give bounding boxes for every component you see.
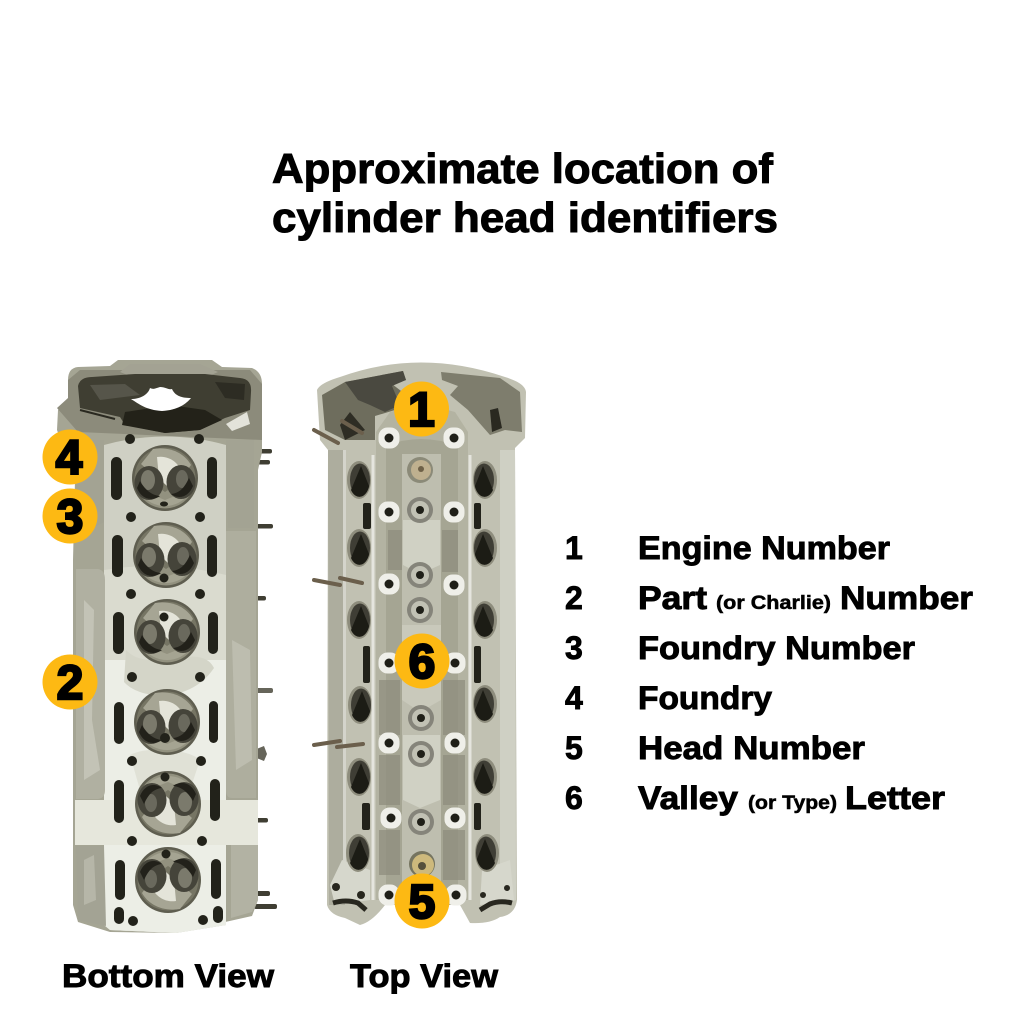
cylinders bbox=[132, 445, 198, 511]
bolt pads bbox=[378, 428, 400, 448]
casting hole bbox=[131, 387, 191, 411]
legend item 5 bbox=[565, 730, 865, 766]
legend item 1: Engine Number bbox=[638, 530, 890, 566]
gasket deck bbox=[104, 436, 226, 933]
dark top chamber bbox=[78, 374, 251, 433]
valve ports bbox=[347, 461, 371, 499]
legend item 6 bbox=[565, 780, 945, 816]
central bosses bbox=[407, 457, 433, 483]
legend item 2 bbox=[565, 580, 973, 616]
label: top view: Top View bbox=[350, 958, 498, 994]
marker 1: 1 bbox=[408, 384, 435, 437]
legend item 4: 4 bbox=[565, 680, 583, 716]
legend item 2: Number bbox=[840, 580, 973, 616]
legend item 4: Foundry bbox=[638, 680, 772, 716]
legend item 3: Foundry Number bbox=[638, 630, 915, 666]
marker 2 bbox=[42, 654, 98, 710]
legend item 6: (or Type) bbox=[748, 793, 837, 814]
legend item 5: Head Number bbox=[638, 730, 865, 766]
water slots and bolt holes bbox=[111, 434, 223, 926]
marker 6: 6 bbox=[409, 636, 435, 689]
casting body bbox=[57, 360, 262, 933]
marker 1 bbox=[394, 382, 449, 437]
legend item 5: 5 bbox=[565, 730, 583, 766]
marker 5: 5 bbox=[409, 876, 435, 929]
legend item 6: 6 bbox=[565, 780, 583, 816]
side slots bbox=[362, 503, 481, 830]
title bbox=[272, 145, 778, 241]
legend item 6: Valley bbox=[638, 780, 738, 816]
studs bbox=[314, 421, 363, 747]
title: Approximate location of bbox=[272, 145, 774, 192]
title: cylinder head identifiers bbox=[272, 194, 778, 241]
marker 6 bbox=[394, 634, 450, 689]
legend item 2: 2 bbox=[565, 580, 583, 616]
marker 3: 3 bbox=[57, 491, 83, 544]
legend item 2: Part bbox=[638, 580, 707, 616]
end details bbox=[332, 883, 512, 910]
marker 5 bbox=[394, 874, 450, 929]
marker 3 bbox=[42, 488, 98, 544]
legend bbox=[565, 530, 973, 816]
marker 4: 4 bbox=[56, 432, 83, 485]
cylinder head illustration: top view bbox=[314, 362, 526, 925]
legend item 2: (or Charlie) bbox=[716, 593, 831, 614]
legend item 4 bbox=[565, 680, 772, 716]
side panels bbox=[76, 440, 104, 530]
casting body bbox=[317, 362, 526, 925]
legend item 3: 3 bbox=[565, 630, 583, 666]
legend item 1: 1 bbox=[565, 530, 583, 566]
studs on right edge bbox=[252, 449, 277, 909]
label: bottom view: Bottom View bbox=[62, 958, 274, 994]
dark top pockets bbox=[322, 371, 406, 440]
legend item 6: Letter bbox=[845, 780, 945, 816]
spine lines bbox=[373, 455, 470, 900]
marker 4 bbox=[42, 430, 98, 485]
marker 2: 2 bbox=[57, 657, 83, 710]
cylinder head illustration: bottom view bbox=[57, 360, 277, 933]
valley channel bbox=[376, 408, 468, 900]
